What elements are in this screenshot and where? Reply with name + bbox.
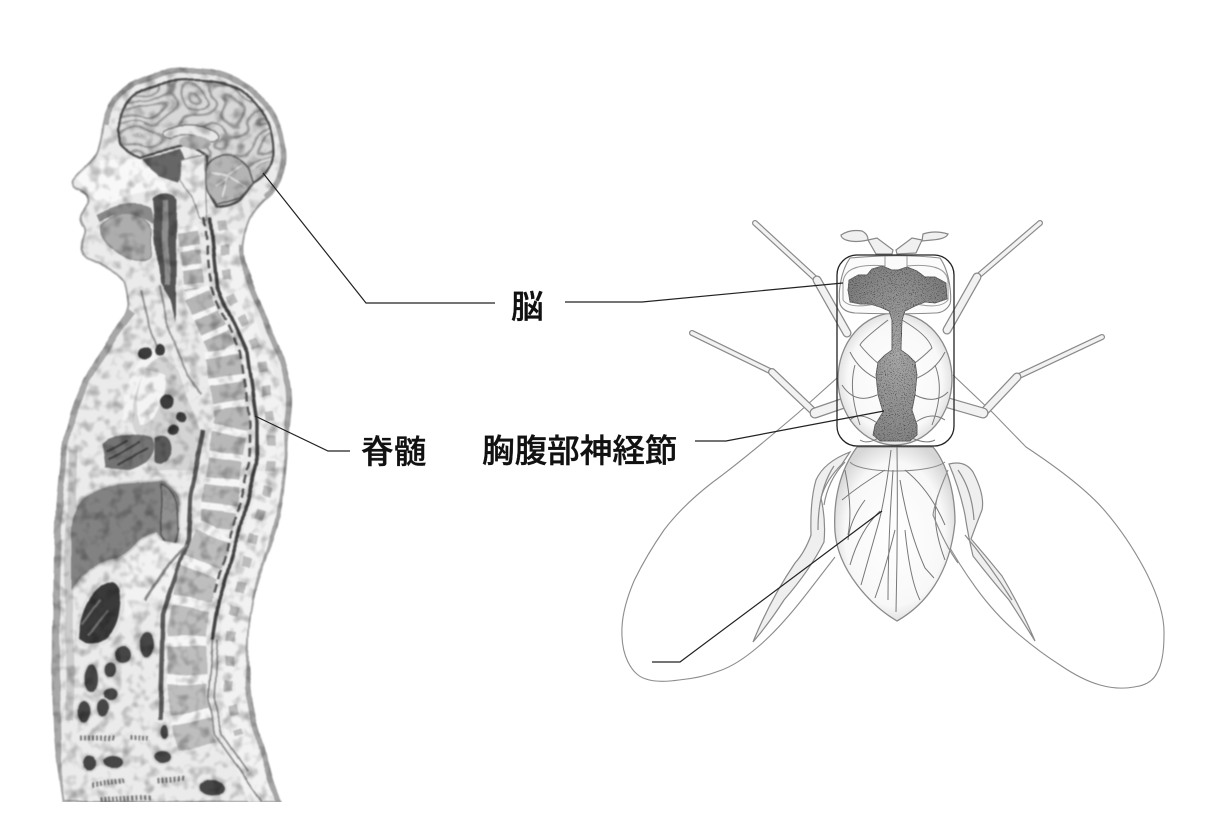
abdomen bbox=[835, 447, 955, 621]
liver bbox=[70, 480, 180, 593]
lower bowel stripes bbox=[80, 738, 185, 800]
body wall shading bbox=[53, 69, 291, 802]
brain and thoracoabdominal ganglion bbox=[848, 266, 947, 441]
thoracic nerves bbox=[842, 320, 948, 442]
left wing bbox=[622, 378, 837, 681]
heart bbox=[102, 434, 155, 470]
vertebral column bbox=[187, 227, 232, 747]
abdominal organs pale bbox=[125, 540, 185, 620]
cerebellum bbox=[206, 156, 254, 205]
wings bbox=[622, 375, 1164, 688]
corpus callosum bbox=[163, 125, 218, 141]
head bbox=[839, 256, 951, 314]
esophagus bbox=[150, 288, 194, 400]
nose and sinus bbox=[76, 158, 176, 205]
head inner outline bbox=[843, 256, 948, 306]
leader line: human spinal cord bbox=[255, 416, 350, 451]
leader line: human brain bbox=[263, 173, 495, 303]
folded wing strips bbox=[753, 452, 1035, 642]
leader line: fly abdomen nerve bbox=[652, 511, 882, 662]
cerebral folds bbox=[117, 80, 272, 170]
human body silhouette bbox=[53, 69, 291, 802]
spinous processes bbox=[222, 220, 272, 735]
human sagittal section bbox=[53, 69, 291, 802]
upper right leg bbox=[947, 223, 1040, 330]
fly bbox=[622, 223, 1164, 688]
spinal cord bbox=[204, 217, 262, 802]
brainstem bbox=[180, 155, 207, 220]
thorax bbox=[838, 313, 952, 445]
label: thoracoabdominal ganglion: 胸腹部神経節 bbox=[482, 432, 677, 469]
abdominal nerves bbox=[842, 446, 945, 612]
label: brain: 脳 bbox=[511, 288, 544, 325]
right wing bbox=[933, 375, 1164, 688]
gallbladder bbox=[161, 484, 178, 544]
pharynx bbox=[152, 193, 177, 322]
mediastinum pale vessel bbox=[129, 352, 200, 470]
lower left leg bbox=[692, 333, 847, 413]
upper left leg bbox=[755, 223, 847, 333]
leader line: fly ganglion bbox=[695, 411, 884, 441]
legs bbox=[692, 223, 1102, 413]
brain outline bbox=[117, 80, 272, 207]
outline box around head and thorax bbox=[837, 255, 954, 446]
tongue bbox=[100, 215, 152, 261]
dark region below the brain bbox=[142, 150, 186, 182]
aorta bbox=[160, 430, 203, 720]
leader line: fly brain bbox=[565, 283, 843, 302]
intestine loops bbox=[77, 631, 225, 797]
brain bbox=[117, 80, 272, 207]
label: spinal cord: 脊髄 bbox=[361, 433, 426, 470]
palate bbox=[95, 204, 155, 225]
lower right leg bbox=[945, 337, 1102, 413]
thoracic dark spots bbox=[138, 344, 186, 435]
stomach bbox=[77, 580, 122, 646]
antennae bbox=[841, 230, 948, 254]
abdominal band bbox=[850, 462, 945, 471]
right wing inner edge over abdomen bbox=[933, 470, 958, 563]
